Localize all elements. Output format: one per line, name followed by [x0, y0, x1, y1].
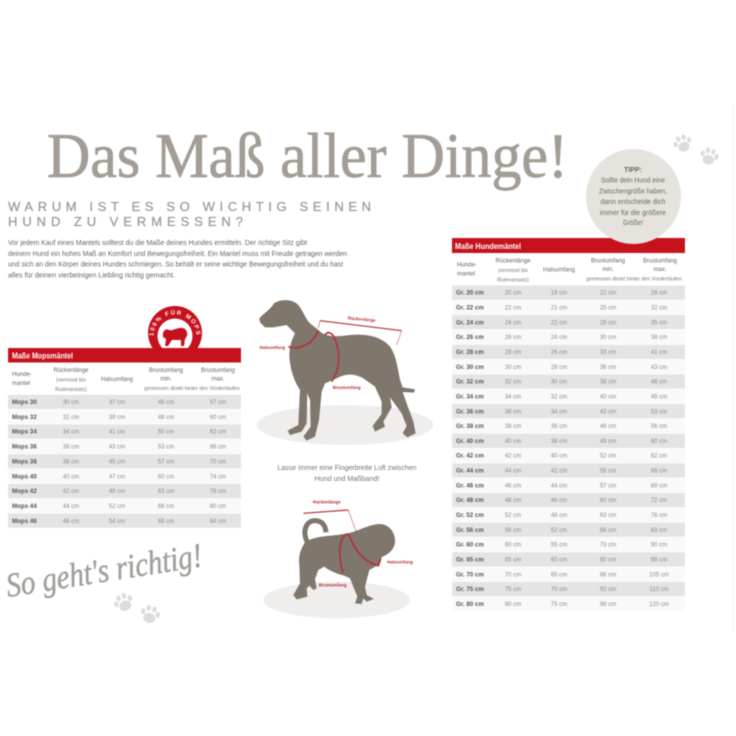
- table rows: 55 cm: [551, 543, 567, 549]
- column headings: Rückenlänge: [495, 259, 531, 265]
- table rows: 80 cm: [600, 558, 616, 564]
- measurement labels: Rückenlänge: [348, 315, 376, 323]
- table rows: 22 cm: [551, 320, 567, 326]
- table: Maße Hundemäntel: [452, 238, 685, 611]
- measuring lines: [288, 321, 402, 382]
- table rows: [8, 395, 241, 528]
- table rows: 50 cm: [158, 430, 174, 436]
- table rows: 32 cm: [551, 394, 567, 400]
- table rows: 38 cm: [600, 380, 616, 386]
- table rows: Gr. 30 cm: [456, 364, 484, 371]
- table rows: 55 cm: [600, 468, 616, 474]
- title: Das Maß aller Dinge!: [47, 121, 568, 191]
- table rows: 57 cm: [158, 459, 174, 465]
- table rows: 30 cm: [505, 365, 521, 371]
- table rows: 69 cm: [651, 483, 667, 489]
- table rows: Gr. 38 cm: [456, 423, 484, 430]
- shadow ellipse: [263, 582, 410, 618]
- table header bar: Maße Hundemäntel: [452, 238, 685, 253]
- table rows: Mops 34: [12, 429, 37, 436]
- table rows: Gr. 75 cm: [456, 586, 484, 593]
- table rows: Mops 38: [12, 458, 37, 465]
- table rows: 78 cm: [210, 489, 226, 495]
- table rows: 48 cm: [158, 415, 174, 421]
- table rows: 75 cm: [505, 587, 521, 593]
- tip circle: TIPP:: [624, 167, 642, 174]
- table rows: 22 cm: [600, 291, 616, 297]
- table rows: 33 cm: [600, 350, 616, 356]
- table rows: 57 cm: [600, 483, 616, 489]
- intro text block: Vor jedem Kauf eines Mantels solltest du die Maße deines Hundes ermitteln. Der richtige Sitz gibt: [8, 238, 307, 247]
- table rows: [452, 286, 685, 611]
- table rows: Gr. 32 cm: [456, 379, 484, 386]
- table rows: 65 cm: [505, 558, 521, 564]
- table rows: 42 cm: [551, 468, 567, 474]
- table rows: 39 cm: [109, 415, 125, 421]
- table rows: 60 cm: [551, 558, 567, 564]
- table header bar: Maße Mopsmäntel: [8, 348, 241, 362]
- table rows: 36 cm: [63, 445, 79, 451]
- table rows: Gr. 44 cm: [456, 468, 484, 474]
- table rows: Gr. 20 cm: [456, 290, 484, 297]
- table rows: 53 cm: [651, 409, 667, 415]
- tip circle: Sollte dein Hund eine: [601, 178, 665, 184]
- table rows: 86 cm: [600, 572, 616, 578]
- table rows: 26 cm: [505, 335, 521, 341]
- column headings: (vermisst bis: [56, 378, 86, 384]
- table rows: 52 cm: [505, 513, 521, 519]
- measurement labels: [259, 315, 376, 390]
- table rows: 19 cm: [551, 291, 567, 297]
- badge: 100% for pugs: [147, 305, 203, 349]
- table rows: 60 cm: [210, 415, 226, 421]
- table rows: 38 cm: [505, 424, 521, 430]
- table rows: Gr. 34 cm: [456, 393, 484, 400]
- column headings: Brustumfang: [149, 368, 183, 374]
- table rows: 40 cm: [63, 474, 79, 480]
- column headings: mantel: [457, 272, 475, 278]
- tip circle: [586, 149, 681, 244]
- pug silhouette: [293, 521, 395, 604]
- column headings: max.: [211, 376, 225, 382]
- table rows: 46 cm: [551, 498, 567, 504]
- table rows: 92 cm: [600, 587, 616, 593]
- table rows: 76 cm: [651, 513, 667, 519]
- table rows: 46 cm: [505, 483, 521, 489]
- table rows: 80 cm: [210, 504, 226, 510]
- table rows: Gr. 65 cm: [456, 556, 484, 564]
- table rows: 90 cm: [651, 543, 667, 549]
- table header bar: Maße Mopsmäntel: Maße Mopsmäntel: [12, 350, 73, 360]
- table rows: 68 cm: [600, 528, 616, 534]
- tip circle: Zwischengröße haben,: [599, 188, 667, 196]
- caption: finger width: [278, 463, 416, 483]
- table rows: 48 cm: [505, 498, 521, 504]
- table rows: 26 cm: [551, 350, 567, 356]
- tip circle: Größe!: [623, 220, 643, 227]
- table rows: Gr. 60 cm: [456, 542, 484, 549]
- dog silhouette: [259, 300, 416, 441]
- intro text block: alles für deinen vierbeinigen Liebling richtig gemacht.: [8, 270, 175, 280]
- shadow ellipse: [257, 405, 433, 445]
- table rows: 72 cm: [651, 498, 667, 504]
- table rows: 74 cm: [210, 474, 226, 480]
- table rows: Mops 32: [12, 414, 37, 421]
- table rows: 45 cm: [109, 459, 125, 465]
- column headings: Rutenansatz): [55, 387, 87, 393]
- heading: why measure: WARUM IST ES SO WICHTIG SEINEN: [8, 199, 371, 214]
- table rows: 28 cm: [505, 350, 521, 356]
- table rows: 38 cm: [651, 335, 667, 341]
- table rows: 22 cm: [505, 306, 521, 312]
- handwritten slogan: So geht's richtig!: [3, 537, 205, 605]
- column headings: Halsumfang: [543, 268, 575, 274]
- table rows: 120 cm: [649, 602, 669, 608]
- table rows: 52 cm: [551, 528, 567, 534]
- table: Maße Mopsmäntel: [8, 348, 241, 528]
- measurement labels: Brustumfang: [333, 385, 361, 390]
- column headings: Hunde-: [457, 263, 477, 269]
- table rows: 99 cm: [651, 558, 667, 564]
- table rows: 46 cm: [158, 400, 174, 406]
- intro text block: deinem Hund ein hohes Maß an Komfort und Bewegungsfreiheit. Ein Mantel muss mit Freude getragen werden: [8, 249, 347, 258]
- table rows: Mops 44: [12, 503, 37, 510]
- illustration: pug with measuring lines: [263, 499, 413, 618]
- measurement labels: [313, 499, 413, 588]
- heading: why measure: HUND ZU VERMESSEN?: [8, 214, 243, 229]
- table rows: 60 cm: [505, 543, 521, 549]
- table rows: 84 cm: [210, 519, 226, 525]
- table rows: 52 cm: [600, 454, 616, 460]
- column headings: [12, 368, 240, 393]
- table rows: Gr. 48 cm: [456, 497, 484, 504]
- table rows: 57 cm: [210, 400, 226, 406]
- table rows: 28 cm: [600, 320, 616, 326]
- column headings: Hunde-: [12, 372, 32, 378]
- table rows: 98 cm: [600, 602, 616, 608]
- measurement labels: Brustumfang: [319, 583, 347, 588]
- table rows: 34 cm: [505, 394, 521, 400]
- table rows: 56 cm: [651, 424, 667, 430]
- table rows: 34 cm: [63, 430, 79, 436]
- caption: finger width: Lasse immer eine Fingerbreite Luft zwischen: [278, 463, 416, 472]
- table rows: 41 cm: [651, 350, 667, 356]
- table rows: Gr. 40 cm: [456, 438, 484, 445]
- column headings: min.: [160, 376, 172, 382]
- table rows: 28 cm: [651, 291, 667, 297]
- table rows: Gr. 24 cm: [456, 319, 484, 326]
- column headings: Brustumfang: [591, 259, 625, 265]
- table rows: Gr. 28 cm: [456, 349, 484, 356]
- table rows: Mops 36: [12, 444, 37, 451]
- table rows: 75 cm: [551, 602, 567, 608]
- table rows: Gr. 56 cm: [456, 527, 484, 534]
- table rows: 41 cm: [109, 430, 125, 436]
- table rows: 38 cm: [551, 439, 567, 445]
- table rows: 56 cm: [505, 528, 521, 534]
- table rows: 46 cm: [600, 424, 616, 430]
- column headings: Rutenansatz): [497, 278, 529, 284]
- table rows: 34 cm: [551, 409, 567, 415]
- table rows: 40 cm: [600, 394, 616, 400]
- measuring lines: [303, 510, 381, 572]
- table rows: Gr. 70 cm: [456, 571, 484, 578]
- table rows: 24 cm: [505, 320, 521, 326]
- table rows: Mops 46: [12, 518, 37, 525]
- intro text block: [8, 238, 347, 280]
- table rows: 48 cm: [551, 513, 567, 519]
- table header bar: Maße Hundemäntel: Maße Hundemäntel: [455, 241, 521, 251]
- table rows: 44 cm: [505, 468, 521, 474]
- intro text block: und sich an den Körper deines Hundes schmiegen. So behält er seine wichtige Bewegungsfreiheit und du hast: [8, 260, 343, 268]
- table rows: 52 cm: [109, 504, 125, 510]
- table rows: 63 cm: [600, 513, 616, 519]
- table rows: 49 cm: [600, 439, 616, 445]
- table rows: 37 cm: [109, 400, 125, 406]
- measurement labels: Halsumfang: [387, 559, 413, 564]
- table rows: Gr. 26 cm: [456, 334, 484, 341]
- table rows: 36 cm: [600, 365, 616, 371]
- table rows: 25 cm: [600, 306, 616, 312]
- table rows: 43 cm: [109, 445, 125, 451]
- column headings: gemessen direkt hinter den Vorderläufen: [144, 386, 240, 392]
- table rows: 49 cm: [109, 489, 125, 495]
- table rows: 62 cm: [210, 430, 226, 436]
- table rows: 43 cm: [651, 365, 667, 371]
- table rows: 32 cm: [63, 415, 79, 421]
- table rows: 47 cm: [109, 474, 125, 480]
- table rows: 105 cm: [649, 572, 669, 578]
- table rows: 49 cm: [651, 394, 667, 400]
- table rows: 30 cm: [600, 335, 616, 341]
- table rows: Gr. 22 cm: [456, 304, 484, 312]
- table rows: 70 cm: [551, 587, 567, 593]
- table rows: Gr. 42 cm: [456, 453, 484, 460]
- table rows: 46 cm: [63, 519, 79, 525]
- column headings: [457, 259, 682, 284]
- icon: paw prints top right: [671, 132, 720, 167]
- table rows: 28 cm: [551, 365, 567, 371]
- table rows: Mops 30: [12, 399, 37, 406]
- table rows: Gr. 46 cm: [456, 482, 484, 489]
- table rows: 32 cm: [505, 380, 521, 386]
- table rows: 46 cm: [651, 380, 667, 386]
- table rows: 53 cm: [158, 445, 174, 451]
- column headings: Brustumfang: [201, 368, 235, 374]
- measurement labels: Halsumfang: [259, 345, 285, 350]
- table rows: 83 cm: [651, 528, 667, 534]
- heading: why measure: [8, 199, 371, 229]
- table rows: 68 cm: [158, 519, 174, 525]
- table rows: 70 cm: [210, 459, 226, 465]
- table rows: 70 cm: [505, 572, 521, 578]
- column headings: Halsumfang: [101, 377, 133, 383]
- table rows: Mops 42: [12, 488, 37, 495]
- table rows: 110 cm: [649, 587, 669, 593]
- table rows: 42 cm: [505, 454, 521, 460]
- table rows: 32 cm: [651, 306, 667, 312]
- table rows: Gr. 52 cm: [456, 512, 484, 519]
- column headings: max.: [653, 267, 667, 273]
- table rows: 36 cm: [505, 409, 521, 415]
- table rows: 35 cm: [651, 320, 667, 326]
- column headings: gemessen direkt hinter den Vorderläufen: [586, 277, 682, 283]
- table rows: 60 cm: [651, 439, 667, 445]
- table rows: 36 cm: [551, 424, 567, 430]
- table rows: 54 cm: [109, 519, 125, 525]
- table rows: 44 cm: [551, 483, 567, 489]
- caption: finger width: Hund und Maßband!: [314, 474, 380, 483]
- table rows: Mops 40: [12, 473, 37, 480]
- table rows: 30 cm: [551, 380, 567, 386]
- table rows: 42 cm: [63, 489, 79, 495]
- table rows: 30 cm: [63, 400, 79, 406]
- measurement labels: Rückenlänge: [313, 499, 341, 504]
- column headings: Brustumfang: [643, 259, 677, 265]
- icon: paw prints bottom left: [111, 590, 162, 625]
- table rows: 44 cm: [63, 504, 79, 510]
- table rows: Gr. 36 cm: [456, 408, 484, 415]
- table rows: 66 cm: [210, 445, 226, 451]
- column headings: (vermisst bis: [498, 268, 528, 274]
- table rows: 73 cm: [600, 543, 616, 549]
- illustration: large dog with measuring lines: [257, 300, 433, 445]
- column headings: mantel: [12, 381, 30, 387]
- table rows: 65 cm: [551, 572, 567, 578]
- table rows: 40 cm: [551, 454, 567, 460]
- table rows: 40 cm: [505, 439, 521, 445]
- table rows: 63 cm: [158, 489, 174, 495]
- column headings: Rückenlänge: [53, 368, 89, 374]
- badge: 100% for pugs: 100% FÜR MOPS: [148, 308, 202, 336]
- table rows: 60 cm: [158, 474, 174, 480]
- table rows: 60 cm: [600, 498, 616, 504]
- table rows: 21 cm: [551, 306, 567, 312]
- table rows: 66 cm: [158, 504, 174, 510]
- table rows: 38 cm: [63, 459, 79, 465]
- tip circle: dann entscheide dich: [600, 199, 666, 206]
- table rows: 43 cm: [600, 409, 616, 415]
- column headings: min.: [602, 267, 614, 273]
- table rows: 62 cm: [651, 454, 667, 460]
- table rows: 80 cm: [505, 602, 521, 608]
- table rows: 66 cm: [651, 468, 667, 474]
- table rows: 24 cm: [551, 335, 567, 341]
- tip circle: immer für die größere: [600, 210, 666, 217]
- table rows: 20 cm: [505, 291, 521, 297]
- table rows: Gr. 80 cm: [456, 601, 484, 608]
